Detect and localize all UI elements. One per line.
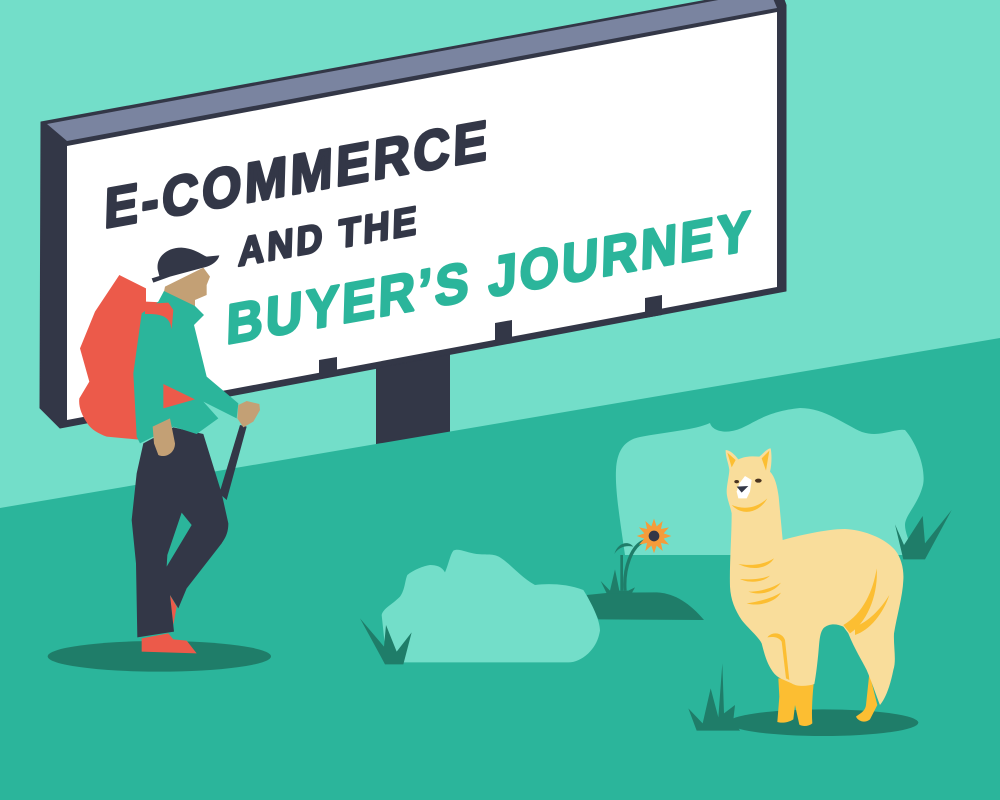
flower stem	[625, 541, 645, 591]
head	[163, 268, 210, 308]
alpaca body	[726, 448, 903, 705]
flower petals	[637, 519, 671, 553]
back leg	[856, 673, 877, 722]
right hand	[237, 401, 260, 427]
title line: BUYER'S JOURNEY: BUYER’S JOURNEY	[226, 200, 751, 357]
ground	[0, 338, 1000, 800]
dark hill	[587, 592, 704, 620]
alpaca	[688, 448, 918, 736]
flower grass	[601, 569, 635, 593]
shoulder strap	[145, 303, 173, 329]
alpaca shadow	[728, 709, 918, 736]
front legs	[777, 678, 814, 726]
jacket	[133, 291, 238, 443]
muzzle	[737, 476, 752, 498]
billboard	[40, 0, 786, 450]
front shoe	[142, 633, 197, 653]
title line: AND THE: AND THE	[238, 198, 417, 275]
trailing shoe	[170, 595, 177, 625]
bottom-left grass	[688, 663, 740, 731]
large bush behind alpaca	[616, 408, 924, 555]
hiker	[48, 248, 271, 672]
front bush	[382, 550, 600, 662]
billboard bottom notches	[319, 295, 662, 378]
front bush with grass	[360, 550, 600, 664]
hiker shadow	[48, 641, 271, 672]
right eye	[755, 479, 762, 483]
gap under arm	[163, 384, 195, 408]
grass tuft	[360, 618, 412, 664]
backpack	[79, 275, 173, 440]
cap	[152, 248, 219, 283]
hill with flower	[587, 519, 704, 620]
billboard white panel	[67, 12, 777, 420]
second stem	[618, 555, 626, 591]
walking pole	[219, 425, 247, 500]
inner ears	[727, 451, 769, 471]
mouth and fur markings	[732, 498, 889, 680]
trousers	[132, 427, 228, 637]
billboard top face	[47, 0, 777, 141]
flower centre	[649, 531, 659, 541]
billboard frame	[40, 0, 786, 428]
billboard post	[376, 345, 450, 450]
gap between legs	[167, 513, 192, 567]
eyes	[734, 480, 739, 483]
title line: E-COMMERCE: E-COMMERCE	[104, 109, 488, 241]
left hand	[153, 418, 175, 456]
flower leaf	[614, 543, 633, 554]
nose	[737, 486, 748, 493]
right grass tuft	[895, 510, 952, 559]
